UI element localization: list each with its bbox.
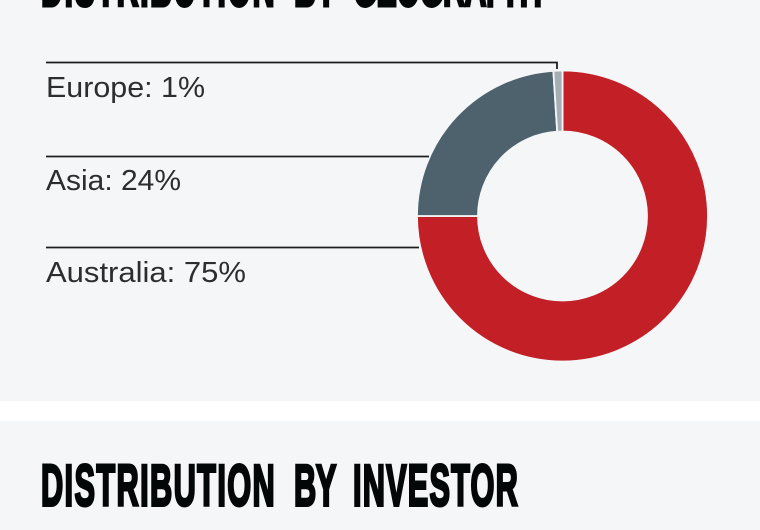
heading: distribution by investor: INVESTOR: [353, 453, 518, 518]
segment: Australia 75%: [417, 70, 708, 362]
heading: distribution by investor: BY: [294, 453, 336, 518]
heading: distribution by investor: DISTRIBUTION: [41, 453, 275, 518]
heading: distribution by investor: [41, 453, 518, 518]
label: Australia: Australia: 75%: [46, 257, 246, 289]
segment: Asia 24%: [417, 71, 557, 216]
panel: distribution by geography: [0, 0, 760, 401]
label: Europe: Europe: 1%: [46, 72, 205, 104]
label: Asia: Asia: 24%: [46, 165, 181, 197]
panel: distribution by investor: [0, 421, 760, 530]
donut chart: [417, 70, 708, 362]
segment: Europe 1%: [553, 70, 562, 132]
heading: distribution by geography: [41, 0, 548, 18]
label: Europe: [46, 62, 557, 104]
